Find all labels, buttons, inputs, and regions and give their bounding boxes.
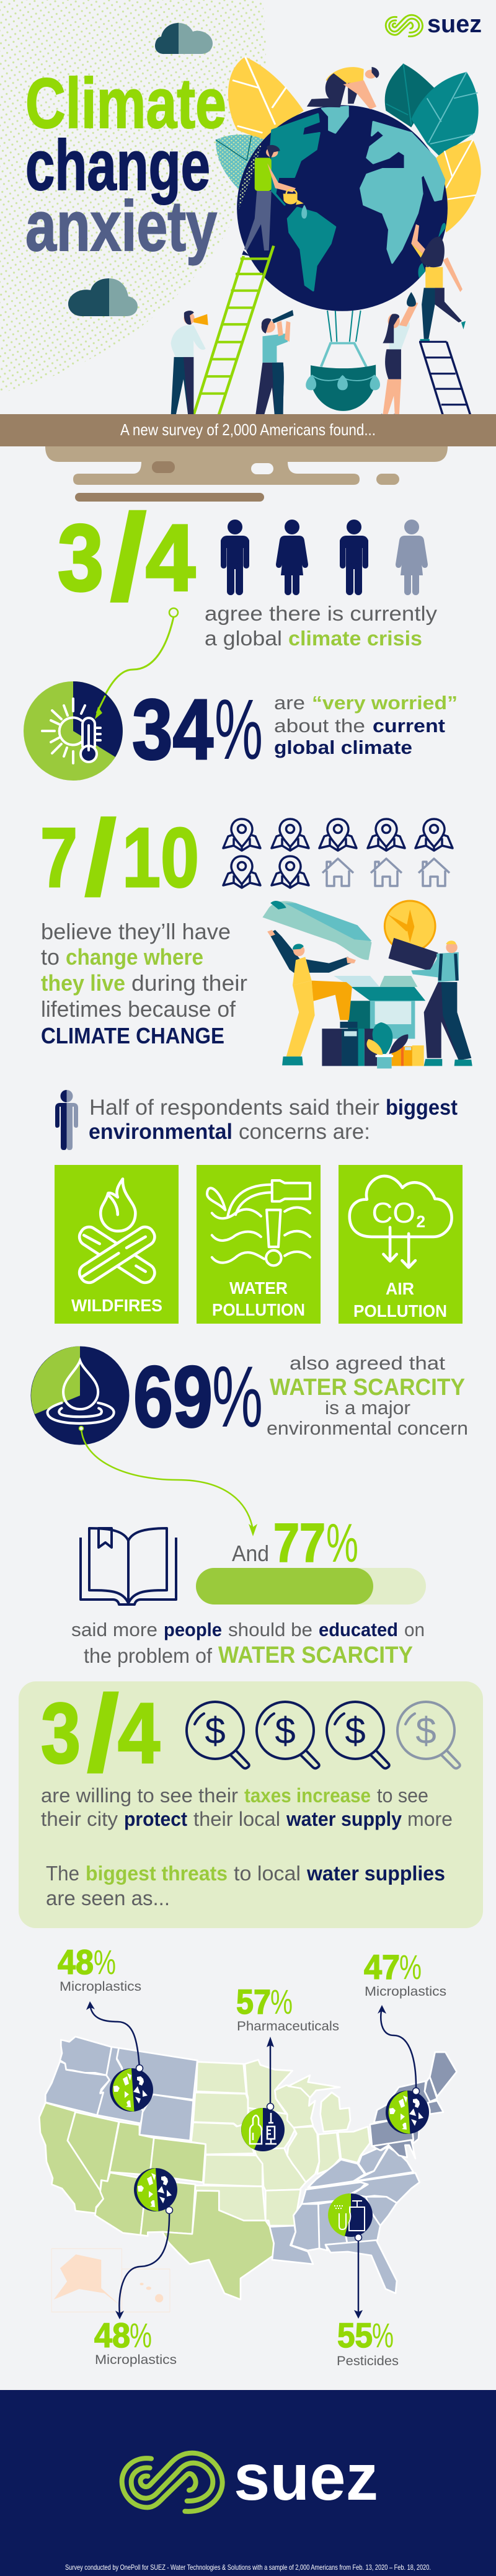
text: taxes increase: water supply: [286, 1808, 402, 1830]
label: 48 percent microplastics: [58, 1942, 141, 1994]
number 69 percent: %: [212, 1348, 263, 1445]
icon: water drop: [48, 1361, 114, 1423]
marker: midwest pharmaceuticals: [236, 1982, 339, 2151]
label: 47 percent microplastics: Microplastics: [365, 1985, 446, 1999]
stat: 3/4 agree: [58, 490, 438, 650]
text: very worried: about the: [274, 715, 365, 737]
navy ladder: [419, 342, 471, 415]
rolled rug: [262, 901, 371, 960]
icons: dollar magnifiers: $: [275, 1710, 296, 1751]
stacked boxes: [322, 1029, 424, 1066]
panel: taxes and threats: [19, 1674, 483, 1928]
text: people should be educated: should be: [228, 1619, 312, 1640]
text: half of respondents: Half of respondents said their: [89, 1095, 379, 1120]
icons: dollar magnifiers: $: [205, 1710, 226, 1751]
text: half of respondents: biggest: [386, 1095, 458, 1120]
logo: SUEZ top right: suez: [427, 11, 482, 38]
fraction 7/10: 7: [40, 810, 78, 905]
text: people should be educated: educated: [319, 1619, 398, 1640]
logo: SUEZ footer: suez: [234, 2441, 378, 2514]
person on top of the globe: [307, 67, 379, 109]
text: people should be educated: WATER SCARCITY: [218, 1642, 413, 1668]
worker right carrying box: [389, 938, 472, 1066]
stat: 34 percent very worried: [24, 681, 458, 781]
fraction 3/4: [58, 490, 195, 625]
title: change: [25, 126, 210, 205]
text: water scarcity: environmental concern: [267, 1417, 468, 1439]
label: 57 percent pharmaceuticals: [236, 1982, 339, 2034]
number 69 percent: 69: [133, 1348, 213, 1445]
US map: [39, 2037, 457, 2312]
number 34 percent: %: [215, 682, 263, 777]
fraction 3/4: 4: [118, 1686, 160, 1781]
clock: [384, 901, 435, 952]
header illustration panel: [0, 0, 482, 419]
label: 48 percent microplastics: %: [130, 2316, 152, 2355]
pie chart 69 percent: [31, 1347, 129, 1445]
ground band with survey caption: A new survey of 2,000 Americans found...: [120, 420, 376, 439]
icons: pins and houses: [223, 819, 453, 888]
fraction 7/10: [40, 799, 199, 917]
text: people should be educated: said more: [71, 1619, 157, 1640]
number 77 percent: 77: [273, 1512, 326, 1573]
person watering: [242, 145, 307, 256]
region: midwest states: [245, 2060, 370, 2226]
icon: CO2 cloud: 2: [416, 1213, 425, 1231]
label: 48 percent microplastics: %: [94, 1942, 116, 1981]
text: taxes increase: their local: [193, 1808, 280, 1830]
label: 55 percent pesticides: 55: [337, 2316, 373, 2355]
panel: water pollution: WATER: [229, 1278, 288, 1298]
dotted shading: [239, 141, 262, 209]
text: change where they live: they live: [41, 970, 125, 996]
icon: sun and thermometer: [42, 699, 100, 763]
fraction 3/4: /: [110, 490, 146, 625]
icon: polluted water pipe: [207, 1180, 310, 1265]
fraction 3/4: [41, 1674, 160, 1793]
text: very worried: [274, 692, 458, 758]
icons: dollar magnifiers: $: [345, 1710, 366, 1751]
text: biggest threats: [46, 1862, 445, 1910]
continent fragment east: [418, 223, 446, 278]
section: biggest environmental concerns: [55, 1090, 463, 1324]
label: 47 percent microplastics: 47: [364, 1947, 400, 1986]
worker left: [267, 930, 358, 1065]
label: 48 percent microplastics: Microplastics: [60, 1980, 141, 1994]
title: Climate: [25, 64, 226, 143]
fraction 7/10: /: [85, 799, 116, 917]
stat: 7/10: [40, 799, 472, 1068]
fraction 3/4: 3: [58, 505, 104, 611]
illustration: movers: [262, 901, 472, 1068]
text: change where they live: during their: [131, 970, 247, 996]
icon: cloud bottom: [68, 278, 138, 316]
text: taxes increase: their city: [41, 1808, 118, 1830]
number 34 percent: 34: [132, 682, 213, 777]
text: change where they live: CLIMATE CHANGE: [41, 1023, 224, 1048]
hot air balloon basket: [306, 311, 380, 411]
icon: CO2 cloud: CO: [371, 1197, 415, 1229]
text: agree there is a crisis: agree there is currently: [205, 602, 438, 625]
text: biggest threats: are seen as...: [46, 1887, 170, 1910]
region: northwest states: [45, 2037, 197, 2141]
text: very worried: global climate: [274, 737, 412, 758]
marker: northwest microplastics: [58, 1942, 153, 2112]
text: water scarcity: is a major: [325, 1397, 410, 1419]
label: 55 percent pesticides: %: [372, 2316, 394, 2355]
text: biggest threats: The: [46, 1862, 79, 1885]
text: taxes increase: to see: [377, 1784, 428, 1807]
panel: water pollution: [197, 1165, 321, 1324]
text: agree there is a crisis: climate crisis: [288, 627, 422, 650]
globe: [237, 105, 448, 311]
logo: SUEZ top right: [386, 11, 482, 38]
marker: southeast pesticides: [328, 2193, 399, 2368]
number 77 percent: %: [326, 1512, 358, 1573]
open box: [334, 976, 425, 1039]
dotted background arc: [0, 0, 266, 393]
text: change where they live: lifetimes because of: [41, 996, 236, 1022]
marker: southwest microplastics: [94, 2168, 177, 2367]
label: 48 percent microplastics: 48: [94, 2316, 130, 2355]
label: 57 percent pharmaceuticals: Pharmaceuticals: [237, 2019, 339, 2034]
text: half of respondents: [89, 1095, 458, 1144]
icons: dollar magnifiers: [187, 1702, 460, 1768]
ground band with survey caption: [0, 414, 496, 446]
woman climbing the globe: [411, 224, 466, 341]
icons: four people: [221, 520, 428, 595]
panel: air pollution: POLLUTION: [353, 1301, 447, 1321]
panel: air pollution: [339, 1165, 463, 1324]
label: 55 percent pesticides: [337, 2316, 399, 2368]
logo: SUEZ footer: [122, 2441, 378, 2514]
text: taxes increase: more: [407, 1808, 453, 1830]
text: water scarcity: [267, 1352, 468, 1439]
text: taxes increase: are willing to see their: [41, 1784, 238, 1807]
label: 47 percent microplastics: [364, 1947, 446, 1999]
marker: northeast microplastics: [364, 1947, 446, 2134]
text: change where they live: believe they’ll have: [41, 919, 231, 944]
label: 55 percent pesticides: Pesticides: [337, 2354, 399, 2368]
text: change where they live: to: [41, 944, 60, 970]
label: 57 percent pharmaceuticals: 57: [236, 1982, 271, 2021]
fraction 3/4: 3: [41, 1686, 81, 1781]
region: southeast states: [270, 2146, 420, 2293]
label: 57 percent pharmaceuticals: %: [270, 1982, 293, 2021]
man with telescope: [255, 310, 293, 419]
text: people should be educated: [71, 1619, 425, 1668]
text: biggest threats: water supplies: [306, 1862, 445, 1885]
footer: [0, 2390, 496, 2576]
icon: fire: [76, 1179, 158, 1286]
text: half of respondents: concerns are:: [239, 1120, 370, 1144]
illustration: globe, leaves and people: [171, 57, 481, 419]
text: taxes increase: taxes increase: [244, 1784, 371, 1807]
region: plains states: [191, 2062, 265, 2221]
panel: wildfires: [55, 1165, 179, 1324]
text: people should be educated: the problem of: [84, 1644, 213, 1667]
arrow: connector to pie: [98, 608, 178, 710]
panel: wildfires: WILDFIRES: [71, 1296, 162, 1315]
text: very worried: “very worried”: [312, 692, 458, 714]
leaf: teal: [411, 72, 479, 156]
text: taxes increase: [41, 1784, 453, 1830]
continent: North America: [269, 114, 319, 205]
leaf: dark teal: [385, 64, 435, 127]
title: [25, 64, 226, 266]
stat: 77 percent: [71, 1512, 426, 1668]
text: change where they live: change where: [66, 944, 203, 970]
leaf: yellow upper left: [228, 57, 304, 139]
label: 48 percent microplastics: Microplastics: [95, 2353, 177, 2367]
continent: Greenland: [322, 107, 348, 133]
stat: 69 percent water scarcity: [31, 1347, 468, 1445]
region: southwest states: [39, 2103, 274, 2299]
icon: open book: [81, 1528, 176, 1604]
text: water scarcity: WATER SCARCITY: [270, 1374, 465, 1401]
woman holding a water drop: [381, 292, 418, 419]
text: very worried: are: [274, 692, 305, 714]
number 77 percent: [232, 1512, 358, 1573]
leaf: yellow right: [435, 139, 481, 232]
ground layers: [45, 446, 448, 502]
text: agree there is a crisis: [205, 602, 438, 650]
label: 48 percent microplastics: 48: [58, 1942, 94, 1981]
text: biggest threats: biggest threats: [86, 1862, 228, 1885]
text: biggest threats: to local: [234, 1862, 301, 1885]
continent: South America: [288, 208, 335, 291]
panel: air pollution: AIR: [386, 1279, 414, 1298]
text: change where they live: [41, 919, 247, 1048]
arrow: connector to 77 percent: [79, 1426, 257, 1536]
green ladder: [193, 246, 273, 417]
icon: CO2 cloud: [350, 1176, 452, 1267]
title: anxiety: [25, 187, 217, 266]
leaf: dotted light teal: [216, 135, 264, 193]
region: Alaska and Hawaii: [51, 2249, 170, 2312]
label: 48 percent microplastics: [94, 2316, 177, 2367]
fraction 7/10: 10: [122, 810, 199, 905]
text: people should be educated: on: [404, 1619, 425, 1640]
fraction 3/4: 4: [146, 505, 195, 611]
icon: cloud top: [155, 23, 213, 54]
fraction 3/4: /: [87, 1674, 118, 1793]
text: taxes increase: protect: [124, 1808, 187, 1830]
text: half of respondents: environmental: [89, 1120, 232, 1144]
man with megaphone: [171, 311, 208, 419]
continent: Eurasia and Africa: [361, 122, 445, 263]
text: very worried: current: [373, 715, 445, 737]
icon: half person: [55, 1090, 78, 1150]
potted plant: [366, 1022, 408, 1068]
number 77 percent: And: [232, 1541, 269, 1566]
text: agree there is a crisis: a global: [205, 627, 282, 650]
panel: water pollution: POLLUTION: [212, 1300, 305, 1319]
region: northeast states: [370, 2052, 457, 2159]
pie chart 34 percent: [24, 681, 123, 781]
icons: dollar magnifiers: $: [415, 1710, 436, 1751]
label: 47 percent microplastics: %: [399, 1947, 422, 1986]
text: people should be educated: people: [164, 1619, 222, 1640]
progress bar: [196, 1568, 426, 1604]
text: water scarcity: also agreed that: [290, 1352, 445, 1374]
